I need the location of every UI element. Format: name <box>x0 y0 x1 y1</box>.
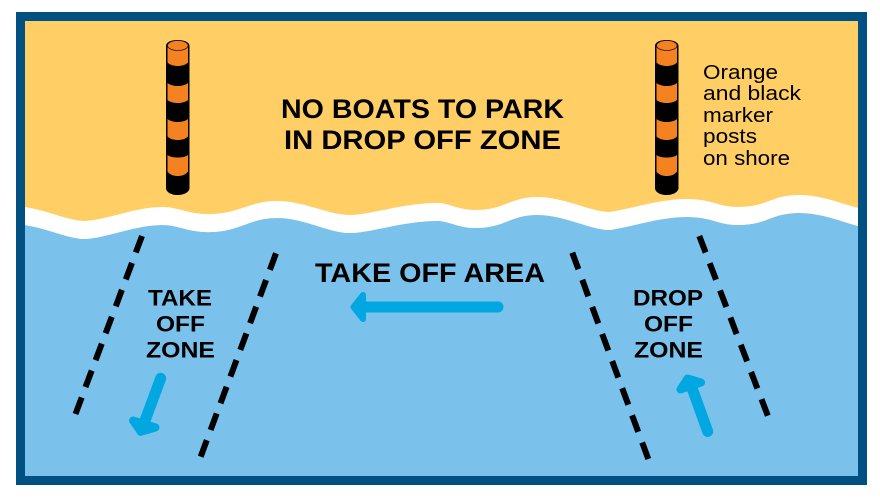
heading: no boats <box>281 94 564 155</box>
dashed lines: take off zone boundaries <box>76 236 276 457</box>
marker post: left <box>166 40 190 195</box>
label: take off zone <box>146 286 215 362</box>
note: marker posts: Orange <box>703 61 778 84</box>
heading: no boats: IN DROP OFF ZONE <box>284 125 561 155</box>
label: drop off zone: OFF <box>644 312 693 336</box>
shoreline: white wave <box>25 195 858 239</box>
arrow: take off area direction <box>354 295 498 319</box>
panel: water <box>25 213 858 476</box>
label: take off zone: TAKE <box>148 286 212 310</box>
note: marker posts: marker <box>703 104 773 127</box>
note: marker posts: on shore <box>703 147 790 170</box>
note: marker posts <box>703 61 802 170</box>
note: marker posts: posts <box>703 125 757 148</box>
label: drop off zone: ZONE <box>634 338 703 362</box>
arrow: take off zone direction <box>133 378 161 432</box>
label: take off zone: OFF <box>156 312 205 336</box>
heading: take off area: TAKE OFF AREA <box>315 258 545 288</box>
heading: no boats: NO BOATS TO PARK <box>281 94 564 124</box>
marker post: right <box>655 40 678 195</box>
panel: sand <box>25 21 858 221</box>
dashed lines: drop off zone boundaries <box>572 236 768 459</box>
arrow: drop off zone direction <box>680 378 708 432</box>
label: drop off zone: DROP <box>633 286 703 310</box>
label: drop off zone <box>633 286 703 362</box>
note: marker posts: and black <box>703 82 802 105</box>
label: take off zone: ZONE <box>146 338 215 362</box>
